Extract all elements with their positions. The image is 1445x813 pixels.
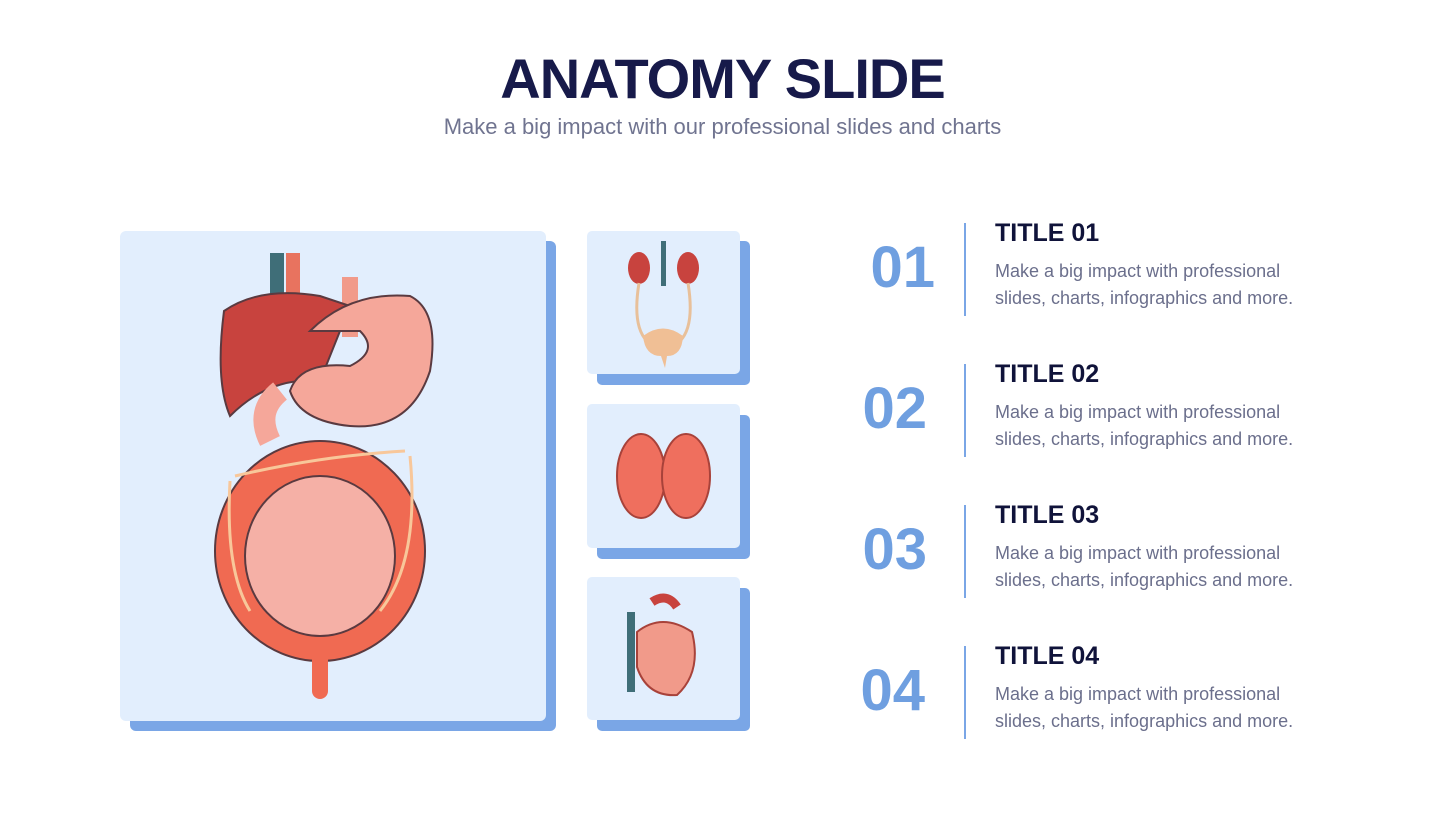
icon: brain: [616, 433, 711, 519]
panel: digestive system: [120, 231, 556, 731]
panel: brain: [587, 404, 750, 559]
panel: kidneys: [587, 231, 750, 385]
icon: kidneys and bladder: [628, 241, 699, 368]
item 04: Make a big impact with professional slides, charts, infographics and more.: [995, 684, 1293, 731]
item 02: Make a big impact with professional slides, charts, infographics and more.: [995, 402, 1293, 449]
subtitle: Make a big impact with our professional slides and charts: [444, 114, 1001, 139]
item 01: [870, 219, 1293, 316]
item 03: Make a big impact with professional slides, charts, infographics and more.: [995, 543, 1293, 590]
item 01: 01: [870, 235, 935, 300]
title: ANATOMY SLIDE: [500, 47, 945, 110]
item 02: 02: [862, 376, 927, 441]
item 02: TITLE 02: [995, 360, 1099, 388]
item 03: 03: [862, 517, 927, 582]
panel: heart: [587, 577, 750, 731]
item 04: 04: [860, 658, 925, 723]
item 02: [862, 360, 1293, 457]
item 03: TITLE 03: [995, 501, 1099, 529]
item 04: TITLE 04: [995, 642, 1099, 670]
item 04: [860, 642, 1293, 739]
icon: heart: [627, 594, 696, 696]
item 01: TITLE 01: [995, 219, 1099, 247]
item 03: [862, 501, 1293, 598]
item 01: Make a big impact with professional slides, charts, infographics and more.: [995, 261, 1293, 308]
icon: digestive organs: [214, 253, 434, 699]
